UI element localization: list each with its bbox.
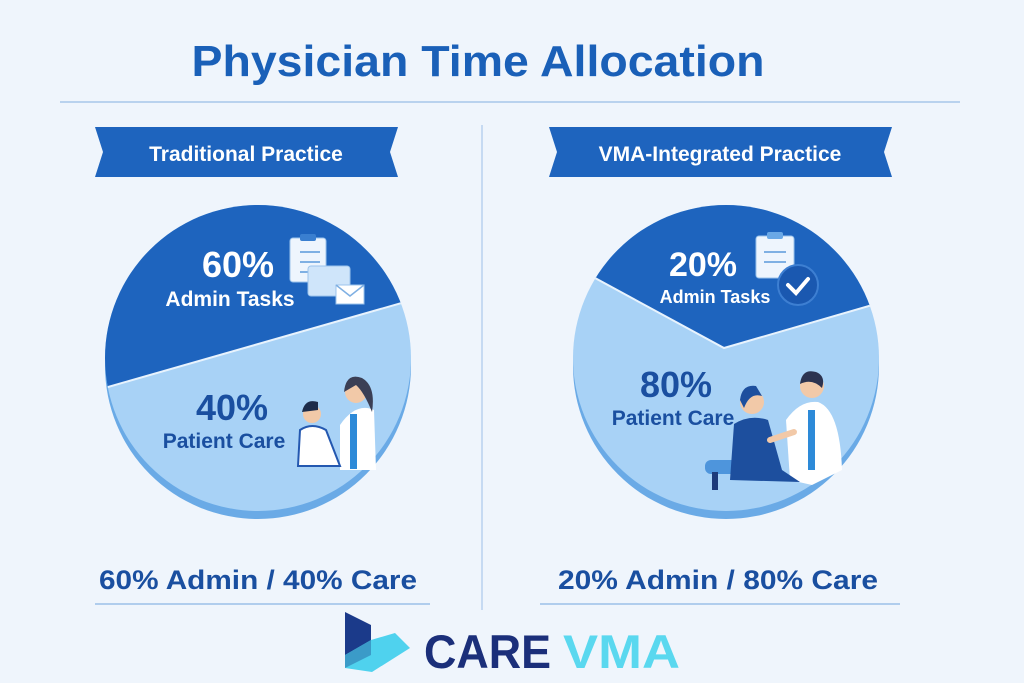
logo: CARE VMA	[345, 612, 680, 678]
label: 20% admin tasks: 20%	[669, 246, 737, 284]
label: 60% admin tasks: 60%	[202, 244, 274, 285]
icon: doctor examining patient	[705, 371, 842, 490]
banner: VMA-integrated practice: VMA-Integrated Practice	[599, 143, 841, 166]
icon: logo mark	[345, 612, 410, 672]
label: 60% admin tasks: Admin Tasks	[165, 288, 295, 311]
logo: CARE VMA: VMA	[563, 625, 680, 678]
label: 40% patient care: Patient Care	[163, 430, 285, 453]
pie chart: traditional	[105, 205, 411, 519]
banner: VMA-integrated practice	[549, 127, 892, 177]
label: 60% admin tasks	[165, 244, 295, 311]
label: 40% patient care: 40%	[196, 387, 268, 428]
summary: VMA-integrated: 20% Admin / 80% Care	[558, 565, 878, 595]
logo: CARE VMA: CARE	[424, 625, 551, 678]
label: 80% patient care: 80%	[640, 364, 712, 405]
title: Physician Time Allocation	[192, 37, 764, 86]
label: 20% admin tasks: Admin Tasks	[660, 287, 770, 307]
pie chart: VMA-integrated	[573, 205, 879, 519]
label: 20% admin tasks	[660, 246, 770, 307]
icon: clipboard with checkmark	[756, 232, 818, 305]
label: 40% patient care	[163, 387, 285, 453]
summary: traditional: 60% Admin / 40% Care	[99, 565, 417, 595]
label: 80% patient care	[612, 364, 734, 430]
icon: clipboard and messages	[290, 234, 364, 304]
banner: traditional practice	[95, 127, 398, 177]
icon: doctor and patient	[298, 377, 376, 470]
banner: traditional practice: Traditional Practice	[149, 143, 343, 166]
label: 80% patient care: Patient Care	[612, 407, 734, 430]
